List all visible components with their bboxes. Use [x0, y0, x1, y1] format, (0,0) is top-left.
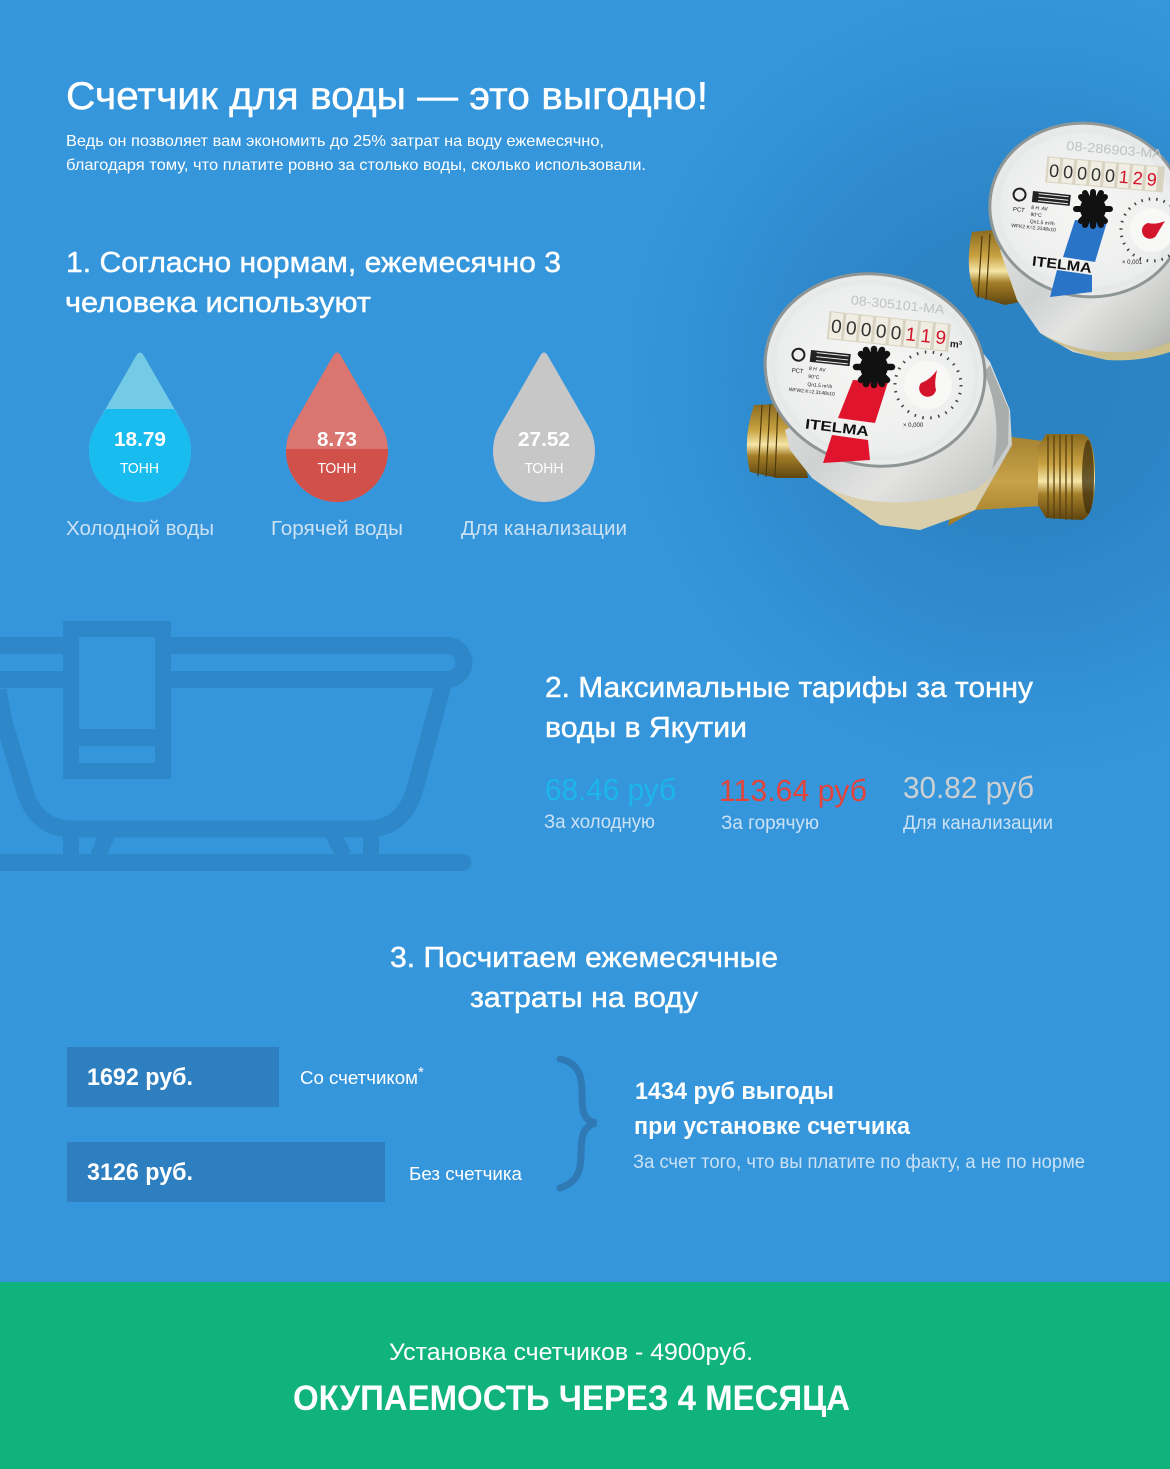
bar: with meter: Со счетчиком: [300, 1068, 418, 1088]
tariff: hot water: 113.64 руб: [719, 773, 867, 808]
photo: blue water meter: ITELMA: [1031, 253, 1093, 276]
heading: section 3: 3. Посчитаем ежемесячные: [390, 942, 778, 974]
photo: red water meter: 00000: [830, 316, 902, 345]
photo: red water meter: [745, 252, 1095, 530]
tariff: hot water: За горячую: [721, 813, 819, 834]
bar: without meter: Без счетчика: [409, 1164, 523, 1184]
heading: section 2: 2. Максимальные тарифы за тонну: [545, 672, 1034, 704]
heading: section 3: затраты на воду: [470, 982, 699, 1014]
tariff: cold water: За холодную: [544, 812, 655, 833]
photo: blue water meter: 8 H AV: [1031, 205, 1049, 213]
savings text: [633, 1078, 1085, 1173]
drop: sewage: ТОНН: [524, 460, 564, 477]
drop: sewage: 27.52: [518, 429, 570, 451]
photo: red water meter: ITELMA: [804, 415, 870, 439]
photo: red water meter: 8 H AV: [809, 366, 826, 374]
drop: hot water: [271, 352, 403, 540]
brass pipe: [747, 404, 1095, 526]
heading: section 2: [545, 672, 1034, 744]
photo: blue water meter: 90°C: [1030, 212, 1042, 219]
photo: red water meter: 119: [905, 324, 947, 349]
footer band: [0, 1282, 1170, 1469]
background glow behind meters: [590, 0, 1170, 810]
drop: cold water: ТОНН: [120, 460, 159, 477]
meter body: [785, 330, 1012, 530]
intro text: Ведь он позволяет вам экономить до 25% затрат на воду ежемесячно,: [66, 133, 604, 150]
drop: cold water: Холодной воды: [66, 518, 214, 540]
savings text: За счет того, что вы платите по факту, а не по норме: [633, 1152, 1085, 1173]
tariff: sewage: [903, 770, 1053, 834]
tariff: hot water: [719, 773, 867, 834]
footer band: ОКУПАЕМОСТЬ ЧЕРЕЗ 4 МЕСЯЦА: [293, 1379, 850, 1418]
bar: with meter: 1692 руб.: [87, 1064, 193, 1091]
photo: blue water meter: 08-286903-MA: [1066, 138, 1163, 161]
heading: section 1: 1. Согласно нормам, ежемесячно 3: [66, 247, 561, 279]
photo: blue water meter: [969, 106, 1170, 360]
photo: blue water meter: Qn1.5 m³/h: [1029, 219, 1055, 227]
bar: with meter: [67, 1047, 424, 1107]
brace: [560, 1059, 596, 1188]
drop: cold water: 18.79: [114, 429, 166, 451]
photo: blue water meter: WFK2 K=2.3148x10: [1011, 223, 1056, 234]
photo: blue water meter: × 0,001: [1122, 260, 1143, 266]
intro text: [66, 133, 646, 174]
savings text: при установке счетчика: [634, 1113, 911, 1140]
main title: Счетчик для воды — это выгодно!: [66, 75, 708, 118]
icon: bathtub: [0, 629, 464, 862]
drop: hot water: 8.73: [317, 429, 357, 451]
photo: red water meter: РСТ: [791, 368, 804, 375]
bar: without meter: [67, 1142, 523, 1202]
heading: section 2: воды в Якутии: [545, 712, 747, 744]
savings text: 1434 руб выгоды: [635, 1078, 834, 1105]
photo: blue water meter: РСТ: [1013, 207, 1025, 214]
heading: section 1: человека используют: [65, 287, 371, 319]
heading: section 1: [65, 247, 561, 319]
photo: red water meter: × 0,000: [903, 423, 924, 429]
photo: red water meter: 08-305101-MA: [850, 292, 946, 317]
footer band: Установка счетчиков - 4900руб.: [389, 1339, 753, 1366]
drop: hot water: ТОНН: [318, 460, 356, 477]
tariff: sewage: 30.82 руб: [903, 770, 1034, 805]
drop: cold water: [66, 352, 214, 540]
photo: red water meter: WFW2 K=2.3148x10: [788, 387, 835, 398]
drop: sewage: Для канализации: [461, 518, 627, 540]
photo: blue water meter: 00000: [1048, 161, 1116, 186]
bar: without meter: 3126 руб.: [87, 1159, 193, 1186]
photo: blue water meter: 129: [1118, 167, 1158, 190]
drop: hot water: Горячей воды: [271, 518, 403, 540]
photo: red water meter: 90°C: [808, 374, 820, 381]
tariff: cold water: [544, 772, 676, 833]
photo: red water meter: m³: [949, 339, 963, 351]
tariff: cold water: 68.46 руб: [545, 772, 676, 807]
tariff: sewage: Для канализации: [903, 813, 1053, 834]
title block: [66, 75, 708, 174]
photo: red water meter: Qn1.5 m³/h: [807, 382, 833, 390]
meter dial: [745, 252, 1005, 488]
drop: sewage: [461, 352, 627, 540]
heading: section 3: [390, 942, 778, 1014]
intro text: благодаря тому, что платите ровно за столько воды, сколько использовали.: [66, 157, 646, 174]
bar: with meter: *: [418, 1064, 424, 1081]
